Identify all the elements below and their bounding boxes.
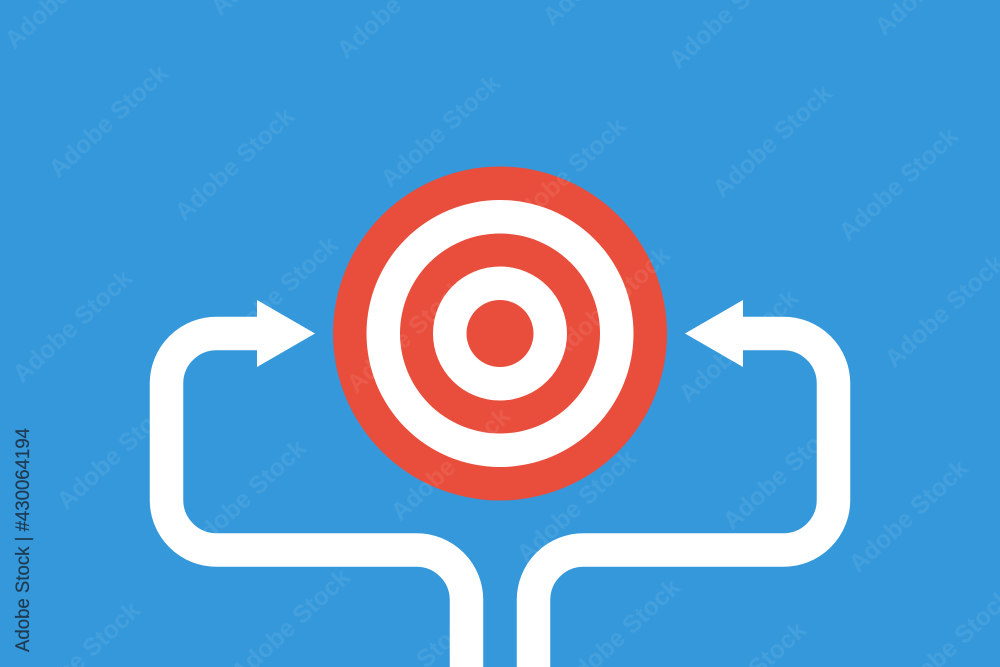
stock watermark pattern: Adobe Stock: [43, 59, 174, 183]
stock watermark pattern: Adobe Stock: [673, 284, 804, 408]
target: concentric bullseye: [333, 166, 667, 500]
stock watermark pattern: Adobe Stock: [501, 112, 632, 236]
stock id label: Adobe Stock | #430064194: [13, 428, 34, 652]
stock watermark pattern: Adobe Stock: [7, 264, 138, 388]
stock watermark pattern: Adobe Stock: [375, 69, 506, 193]
stock watermark pattern: Adobe Stock: [213, 231, 344, 355]
stock watermark pattern: Adobe Stock: [717, 411, 848, 535]
stock watermark pattern: Adobe Stock: [843, 454, 974, 578]
stock watermark pattern: Adobe Stock: [181, 434, 312, 558]
stock watermark pattern: Adobe Stock: [511, 444, 642, 568]
stock watermark pattern: Adobe Stock: [51, 391, 182, 515]
stock watermark pattern: Adobe Stock: [169, 102, 300, 226]
arrow: left path pointing to target: [166, 300, 466, 667]
arrow: right path pointing to target: [534, 300, 834, 667]
stock watermark pattern: Adobe Stock: [385, 402, 516, 526]
stock watermark pattern: Adobe Stock: [833, 122, 964, 246]
stock watermark pattern: Adobe Stock: [545, 241, 676, 365]
stock watermark pattern: Adobe Stock: [707, 79, 838, 203]
stock watermark pattern: Adobe Stock: [341, 274, 472, 398]
